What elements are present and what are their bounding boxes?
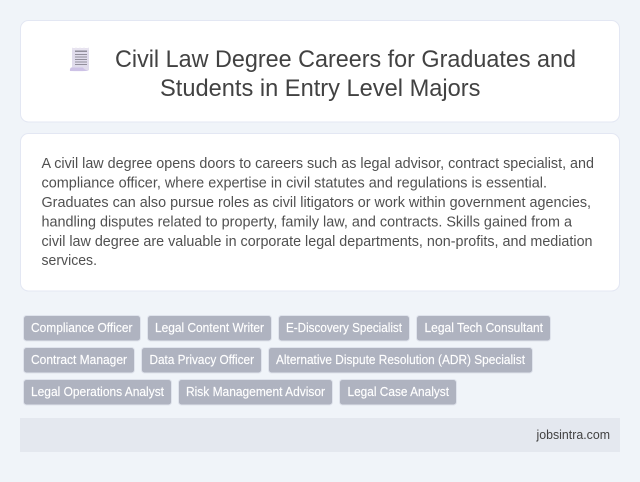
tag: Legal Content Writer: [148, 316, 272, 341]
tag: Risk Management Advisor: [178, 380, 332, 405]
tag: Contract Manager: Contract Manager: [31, 353, 127, 367]
tag: Legal Tech Consultant: Legal Tech Consultant: [424, 321, 544, 335]
tag: E-Discovery Specialist: [278, 316, 410, 341]
footer site name: jobsintra.com: [536, 428, 610, 442]
tag: Data Privacy Officer: [142, 348, 262, 373]
description text: Graduates can also pursue roles as civil litigators or work within government agencies,: [42, 195, 591, 211]
tag: E-Discovery Specialist: E-Discovery Specialist: [286, 321, 402, 335]
description text: handling disputes related to property, family law, and contracts. Skills gained from a: [42, 214, 573, 230]
tag: Legal Operations Analyst: [24, 380, 172, 405]
icon: legal scroll document: [70, 48, 89, 71]
tag: Risk Management Advisor: Risk Management Advisor: [186, 385, 325, 399]
description text: A civil law degree opens doors to careers such as legal advisor, contract specialist, and: [42, 156, 594, 172]
title: [115, 46, 576, 102]
description text: services.: [42, 253, 97, 269]
panel: header: [20, 20, 620, 122]
panel: description: [20, 134, 620, 291]
tag list: [24, 316, 550, 405]
tag: Legal Case Analyst: [340, 380, 456, 405]
tag: Legal Operations Analyst: Legal Operations Analyst: [31, 385, 164, 399]
title: Students in Entry Level Majors: [160, 75, 480, 102]
tag: Legal Case Analyst: Legal Case Analyst: [348, 385, 449, 399]
footer: [20, 418, 620, 452]
description text: compliance officer, where expertise in civil statutes and regulations is essential.: [42, 176, 547, 192]
tag: Contract Manager: [24, 348, 134, 373]
tag: Compliance Officer: Compliance Officer: [31, 321, 132, 335]
tag: Alternative Dispute Resolution (ADR) Specialist: [268, 348, 532, 373]
description text: [42, 156, 594, 269]
description text: civil law degree are valuable in corporate legal departments, non-profits, and mediation: [42, 234, 592, 250]
title: Civil Law Degree Careers for Graduates and: [115, 46, 576, 73]
tag: Legal Content Writer: Legal Content Writer: [155, 321, 264, 335]
tag: Compliance Officer: [24, 316, 140, 341]
tag: Data Privacy Officer: Data Privacy Officer: [150, 353, 254, 367]
tag: Alternative Dispute Resolution (ADR) Specialist: Alternative Dispute Resolution (ADR) Specialist: [276, 353, 525, 367]
tag: Legal Tech Consultant: [416, 316, 550, 341]
